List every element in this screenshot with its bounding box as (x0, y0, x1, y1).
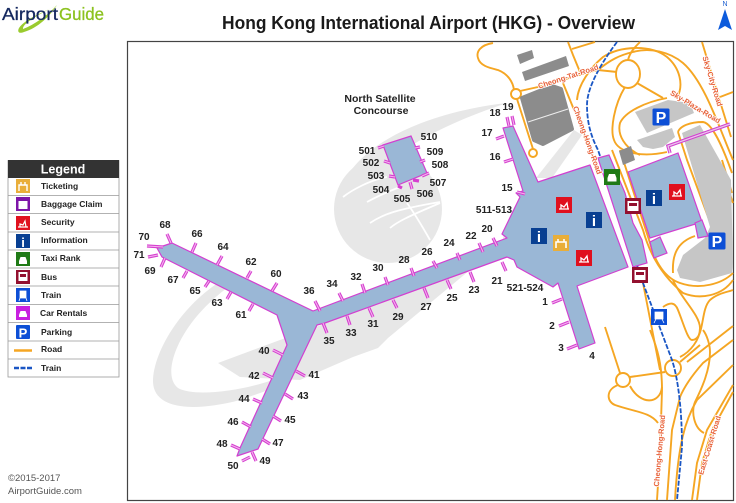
legend: ticketing: Ticketing (41, 181, 78, 191)
gate numbers: 29 (392, 312, 404, 323)
gate numbers: 3 (558, 343, 564, 354)
gate numbers: 17 (481, 128, 493, 139)
legend: ticketing (16, 179, 78, 193)
gate numbers: 25 (446, 293, 458, 304)
gate numbers: 68 (159, 220, 171, 231)
gate numbers: 44 (238, 394, 250, 405)
icon: bus (632, 267, 648, 283)
gate numbers: 16 (489, 152, 501, 163)
gate numbers: 15 (501, 183, 513, 194)
parking lots (635, 100, 733, 282)
gates (147, 116, 577, 461)
gate numbers: 27 (420, 302, 432, 313)
road labels: Sky-Plaza-Road (669, 88, 722, 126)
icon: parking: P (656, 110, 667, 127)
gate numbers: 71 (133, 250, 145, 261)
icon: information (531, 228, 547, 246)
roads (478, 42, 733, 500)
icon: taxi (604, 169, 620, 185)
copyright (8, 473, 82, 497)
logo: AirportGuide: Airport (2, 4, 58, 24)
gate numbers: 501 (359, 146, 376, 157)
road labels: Sky-City-Road (700, 55, 724, 108)
icon: north arrow (718, 1, 732, 30)
gate numbers: 26 (421, 247, 433, 258)
gate numbers: 70 (138, 232, 150, 243)
terminal: small annex (650, 237, 667, 258)
gate numbers (133, 102, 595, 472)
legend (8, 160, 119, 377)
road labels (537, 55, 724, 487)
gate numbers: 69 (144, 266, 156, 277)
icon: parking (652, 108, 670, 127)
gate numbers: 64 (217, 242, 229, 253)
gate numbers: 2 (549, 321, 555, 332)
icon: parking: P (712, 234, 723, 251)
road labels: Cheong-Hong-Road (571, 105, 604, 176)
gate numbers: 507 (430, 178, 447, 189)
title: Hong Kong International Airport (HKG) - Overview (222, 13, 636, 33)
logo: AirportGuide (2, 4, 104, 33)
gate numbers: 35 (323, 336, 335, 347)
gate numbers: 66 (191, 229, 203, 240)
legend: bus: Bus (41, 272, 57, 282)
icon: train (651, 309, 667, 325)
legend: road: Road (41, 344, 62, 354)
gate numbers: 508 (432, 160, 449, 171)
legend: car rentals (16, 306, 88, 320)
road labels: East-Coast-Road (696, 414, 723, 476)
road labels: Cheong-Hong-Road (652, 414, 667, 487)
icon: information (586, 212, 602, 230)
legend header: Legend (41, 162, 85, 176)
gate numbers: 63 (211, 298, 223, 309)
terminal: connector (598, 155, 647, 267)
legend: car rentals: Car Rentals (40, 308, 88, 318)
gate numbers: 34 (326, 279, 338, 290)
legend: train: Train (41, 290, 61, 300)
watermark: white streaks (343, 177, 440, 240)
heading: North Satellite Concourse (344, 93, 416, 117)
icon: bus (625, 198, 641, 214)
legend: information (16, 234, 88, 250)
gate numbers: 36 (303, 286, 315, 297)
gate numbers: 1 (542, 297, 548, 308)
train line (587, 42, 682, 500)
gate numbers: 32 (350, 272, 362, 283)
gate numbers: 45 (284, 415, 296, 426)
gate numbers: 521-524 (507, 283, 544, 294)
legend: information: Information (41, 235, 88, 245)
gate numbers: 505 (394, 194, 411, 205)
gate numbers: 62 (245, 257, 257, 268)
map frame (128, 42, 734, 500)
copyright: AirportGuide.com (8, 486, 82, 497)
gate numbers: 28 (398, 255, 410, 266)
buildings (517, 50, 635, 165)
legend: baggage claim (16, 197, 103, 211)
watermark: globe and swoosh (153, 103, 582, 407)
legend: parking (16, 325, 72, 340)
legend: taxi rank (16, 252, 81, 266)
icon: information: i (537, 229, 541, 246)
gate numbers: 503 (368, 171, 385, 182)
gate numbers: 48 (216, 439, 228, 450)
gate numbers: 67 (167, 275, 179, 286)
gate numbers: 40 (258, 346, 270, 357)
icon: ticketing (553, 235, 569, 251)
gate numbers: 20 (481, 224, 493, 235)
gate numbers: 506 (417, 189, 434, 200)
legend: train line (14, 363, 61, 373)
road labels: Cheong-Tat-Road (537, 62, 600, 91)
terminal: main concourses (157, 126, 628, 456)
legend: security: Security (41, 217, 75, 227)
gate numbers: 19 (502, 102, 514, 113)
legend: parking: P (19, 326, 28, 340)
icon: north arrow: N (722, 1, 728, 8)
gate numbers: 511-513 (476, 205, 513, 216)
gate numbers: 41 (308, 370, 320, 381)
gate numbers: 30 (372, 263, 384, 274)
legend: security (16, 216, 75, 230)
icon: information: i (592, 213, 596, 230)
gate numbers: 46 (227, 417, 239, 428)
terminal: east block (628, 153, 702, 238)
gate numbers: 24 (443, 238, 455, 249)
gate numbers: 49 (259, 456, 271, 467)
gate numbers: 18 (489, 108, 501, 119)
skybridge (668, 124, 730, 153)
gate numbers: 504 (373, 185, 390, 196)
gate numbers: 42 (248, 371, 260, 382)
gate numbers: 65 (189, 286, 201, 297)
legend: road (14, 344, 62, 354)
terminal: north satellite (383, 136, 427, 185)
legend header (8, 160, 119, 178)
gate numbers: 31 (367, 319, 379, 330)
legend: train line: Train (41, 363, 61, 373)
icon: security (556, 197, 572, 213)
legend: bus (16, 270, 57, 284)
heading: North Satellite Concourse: North Satellite (344, 93, 416, 105)
icon: information (646, 190, 662, 208)
copyright: ©2015-2017 (8, 473, 60, 484)
heading: North Satellite Concourse: Concourse (354, 105, 409, 117)
gate numbers: 60 (270, 269, 282, 280)
apron (522, 86, 572, 144)
icon: security (576, 250, 592, 266)
icon: parking (708, 232, 726, 251)
gate numbers: 33 (345, 328, 357, 339)
terminal: east connector (695, 220, 708, 238)
logo: AirportGuide: Guide (59, 4, 104, 24)
gate numbers: 4 (589, 351, 595, 362)
gate numbers: 509 (427, 147, 444, 158)
gate numbers: 502 (363, 158, 380, 169)
gate numbers: 61 (235, 310, 247, 321)
legend: taxi rank: Taxi Rank (41, 253, 81, 263)
legend: information: i (21, 235, 25, 250)
icon: information: i (652, 191, 656, 208)
icon: security (669, 184, 685, 200)
gate numbers: 510 (421, 132, 438, 143)
legend: parking: Parking (41, 327, 72, 337)
gate numbers: 21 (491, 276, 503, 287)
legend: train (16, 288, 61, 302)
legend: baggage claim: Baggage Claim (41, 199, 103, 209)
gate numbers: 50 (227, 461, 239, 472)
gate numbers: 23 (468, 285, 480, 296)
gate numbers: 47 (272, 438, 284, 449)
gate numbers: 22 (465, 231, 477, 242)
gate numbers: 43 (297, 391, 309, 402)
